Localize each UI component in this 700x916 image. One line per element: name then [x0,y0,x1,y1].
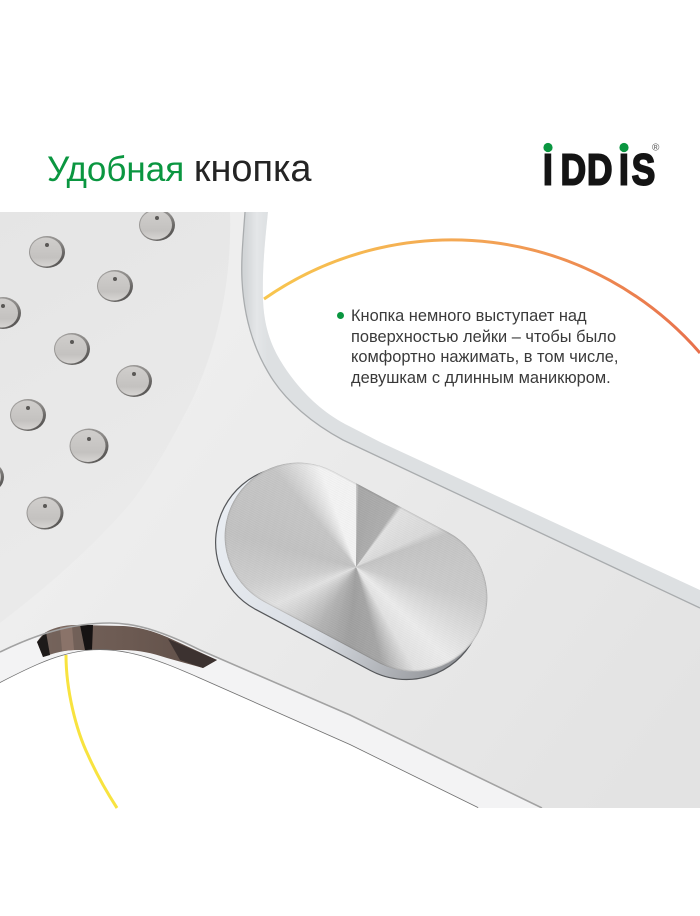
logo: iddis: ® [652,142,660,154]
spray nozzles [0,209,175,530]
chrome rim [0,624,540,808]
description text: девушкам с длинным маникюром. [351,369,611,387]
callout arc: orange [264,240,700,353]
spray head face [0,212,126,286]
title: Удобная кнопка [47,148,312,190]
description text: комфортно нажимать, в том числе, [351,348,618,366]
shower handle and head body [0,209,700,808]
inner rim line [242,212,700,608]
upper rim line [0,623,542,808]
button face [199,436,513,698]
bullet dot [337,312,344,319]
handle surface [131,224,700,808]
callout arc: yellow [66,655,117,808]
description text: Кнопка немного выступает над [351,307,587,325]
lower rim outline [0,650,478,808]
chrome reflection band [37,625,217,668]
description text [351,307,618,387]
button chrome bezel [215,470,474,680]
shower head photo [0,212,700,809]
description text: поверхностью лейки – чтобы было [351,328,616,346]
